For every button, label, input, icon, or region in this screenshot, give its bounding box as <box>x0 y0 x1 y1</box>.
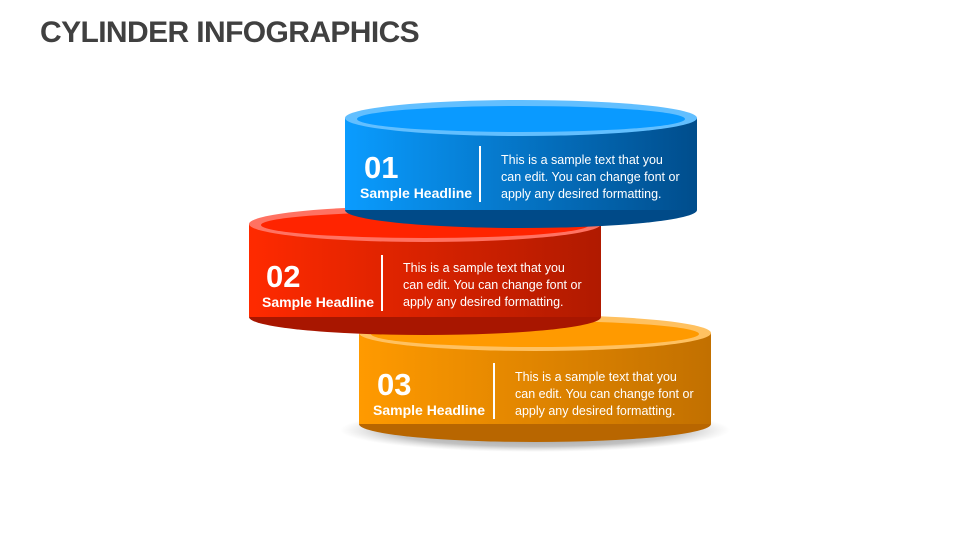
number 03: 03 <box>377 367 411 402</box>
cylinder 02 <box>249 206 601 335</box>
body text 01: This is a sample text that you <box>501 153 663 167</box>
body text 01: can edit. You can change font or <box>501 170 680 184</box>
cylinder 03 <box>359 315 711 442</box>
body text 02: can edit. You can change font or <box>403 278 582 292</box>
body text 03: can edit. You can change font or <box>515 387 694 401</box>
body text 03: This is a sample text that you <box>515 370 677 384</box>
shadow <box>340 408 730 452</box>
headline 02: Sample Headline <box>262 294 374 310</box>
headline 01: Sample Headline <box>360 185 472 201</box>
body text 02: This is a sample text that you <box>403 261 565 275</box>
cylinder 01 <box>345 100 697 228</box>
body text 01: apply any desired formatting. <box>501 187 662 201</box>
number 01: 01 <box>364 150 398 185</box>
body text 02: apply any desired formatting. <box>403 295 564 309</box>
title: CYLINDER INFOGRAPHICS <box>40 16 419 49</box>
headline 03: Sample Headline <box>373 402 485 418</box>
number 02: 02 <box>266 259 300 294</box>
body text 03: apply any desired formatting. <box>515 404 676 418</box>
